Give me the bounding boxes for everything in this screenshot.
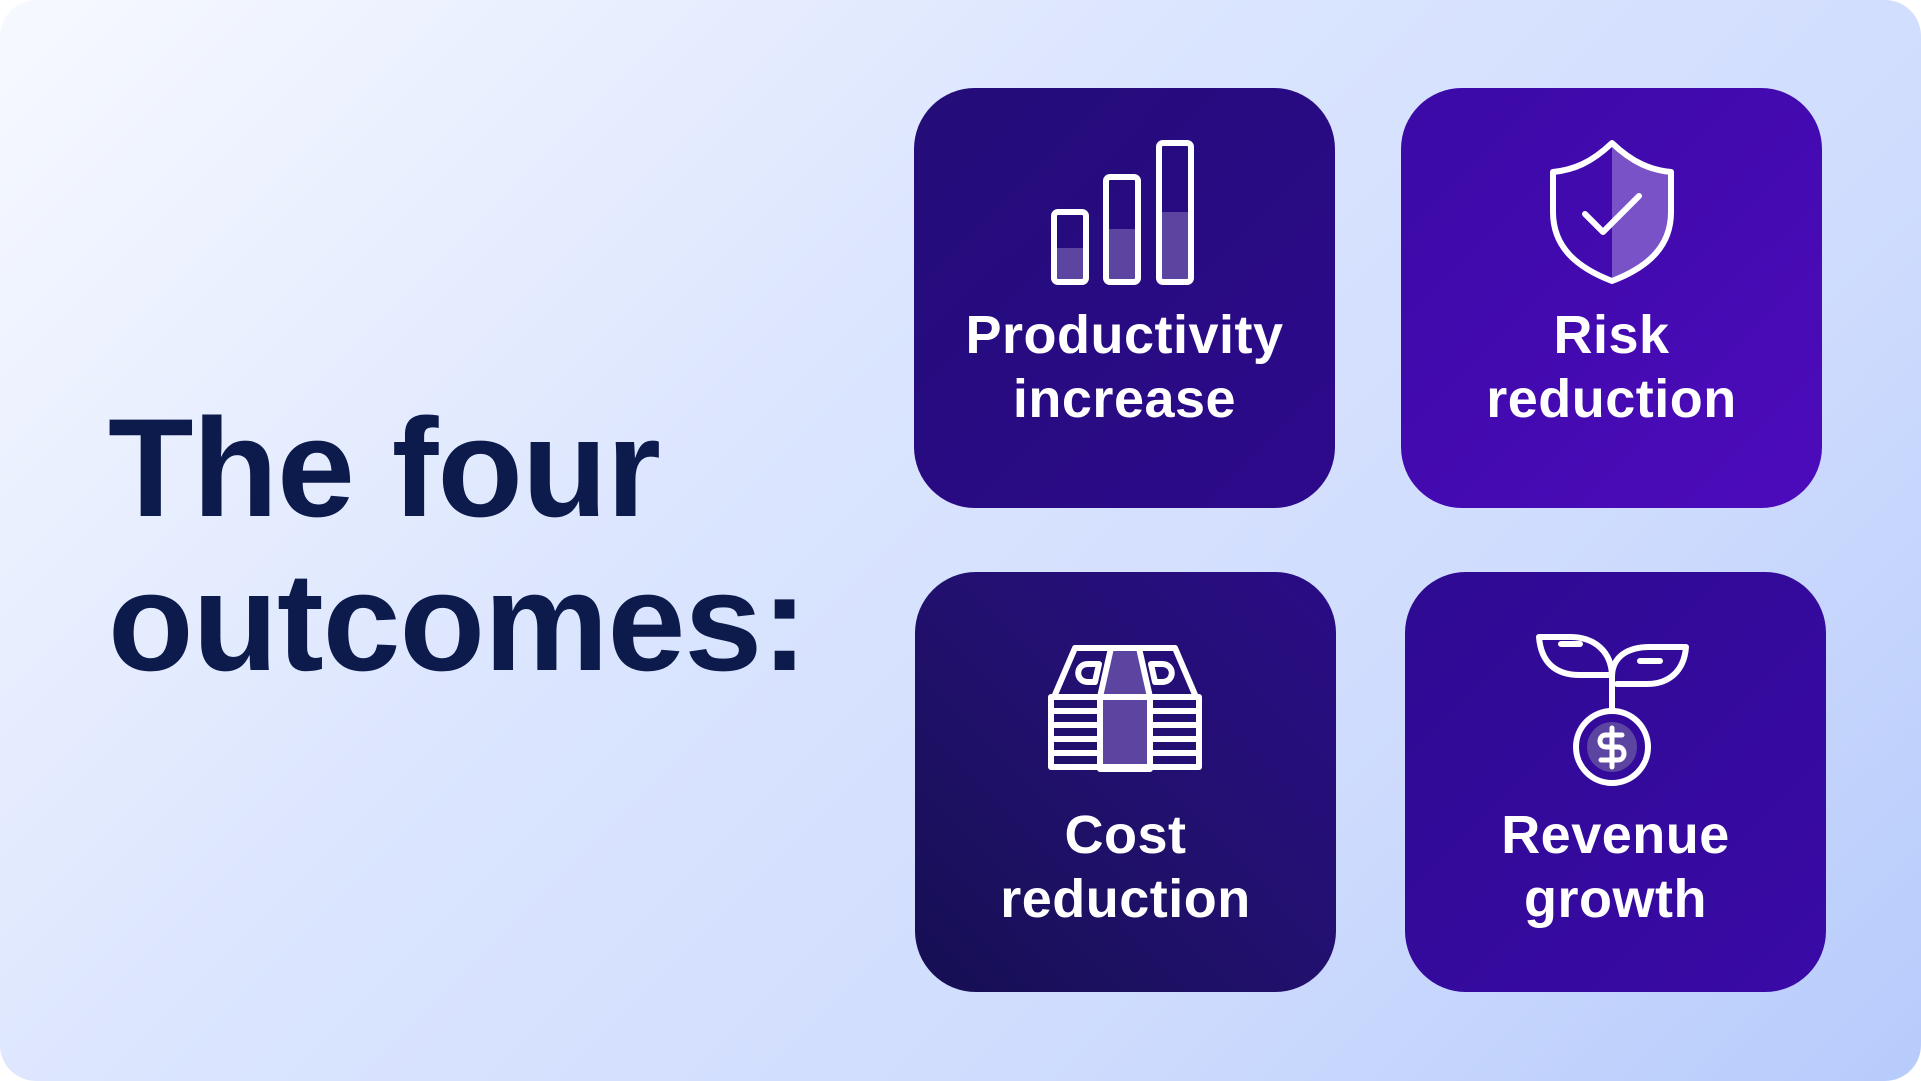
title: The four bbox=[108, 389, 660, 546]
card: revenue growth bbox=[1405, 572, 1826, 992]
icon: shield bbox=[1550, 140, 1674, 284]
label: Cost bbox=[1064, 805, 1186, 865]
label: increase bbox=[1013, 369, 1236, 429]
label: Revenue bbox=[1501, 805, 1730, 865]
card: cost reduction bbox=[915, 572, 1336, 992]
icon: plant with coin bbox=[1536, 634, 1689, 786]
card: risk reduction bbox=[1401, 88, 1822, 508]
card: productivity increase bbox=[914, 88, 1335, 508]
label: Productivity bbox=[965, 305, 1284, 365]
label bbox=[1486, 305, 1737, 429]
label bbox=[965, 305, 1284, 429]
label bbox=[1000, 805, 1251, 929]
label bbox=[1501, 805, 1730, 929]
icon: money stack bbox=[1048, 645, 1202, 772]
label: growth bbox=[1524, 869, 1707, 929]
icon: bar chart bbox=[1051, 140, 1194, 285]
title bbox=[108, 389, 807, 700]
label: Risk bbox=[1553, 305, 1670, 365]
label: reduction bbox=[1486, 369, 1737, 429]
label: reduction bbox=[1000, 869, 1251, 929]
title: outcomes: bbox=[108, 543, 807, 700]
